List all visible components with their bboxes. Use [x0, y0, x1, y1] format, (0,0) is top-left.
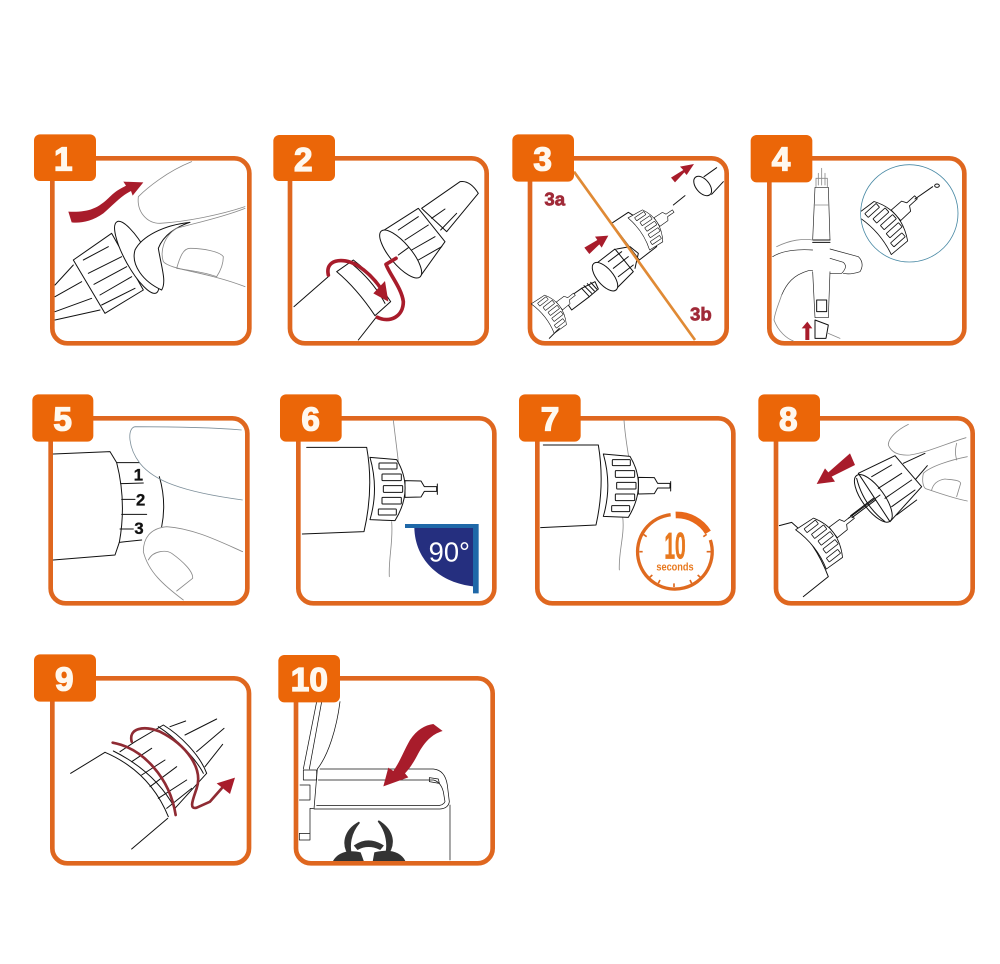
step badge 5 [32, 394, 93, 442]
icon: biohazard symbol [333, 821, 406, 862]
panel frame 1 [52, 158, 249, 343]
icon: pen head and needle [779, 493, 881, 597]
panel: step 2 screw on needle [273, 135, 487, 343]
panel frame 2 [290, 158, 487, 343]
panel: step 5 select dose [32, 394, 247, 603]
step badge 4 [751, 135, 812, 182]
step badge 8 [758, 394, 820, 442]
step badge 3: 3 [533, 141, 552, 178]
icon: skin line [619, 420, 629, 570]
panel: step 10 dispose in sharps bin [278, 655, 493, 863]
step badge 1 [34, 134, 96, 181]
icon: fingers on dial [130, 427, 243, 600]
step badge 9: 9 [55, 661, 74, 698]
step badge 2 [273, 135, 335, 181]
step badge 6 [280, 394, 342, 442]
icon: dose dial [53, 452, 164, 560]
dose number 1: 1 [134, 465, 143, 484]
icon: 90 degree angle [405, 524, 479, 593]
panel: step 8 replace outer cap [758, 394, 973, 603]
panel frame 7 [537, 418, 733, 603]
step badge 8: 8 [779, 401, 798, 438]
step badge 10: 10 [291, 662, 328, 699]
icon: hand holding pen upright [773, 168, 862, 341]
icon: fingers pulling cap [55, 162, 245, 320]
panel frame 6 [298, 418, 494, 603]
icon: sharps bin [299, 702, 450, 860]
arrow: drop into bin [383, 724, 443, 786]
timer: 10 seconds: seconds [656, 561, 694, 573]
panel: step 7 hold for 10 seconds [519, 394, 733, 603]
step badge 4: 4 [772, 141, 791, 178]
step badge 7: 7 [541, 401, 559, 438]
panel: step 1 remove outer cap [34, 134, 249, 343]
inset: needle droplet [856, 165, 958, 262]
step badge 1: 1 [54, 141, 73, 178]
panel frame 8 [776, 418, 973, 603]
step badge 5: 5 [53, 401, 72, 438]
divider: 3a and 3b [574, 172, 695, 340]
arrow: cap direction [817, 453, 855, 484]
icon: 90 degree angle: 90° [429, 537, 470, 568]
panel: step 3 attach needle and remove cap [512, 134, 727, 343]
arrow: unscrew direction [113, 728, 235, 815]
panel: step 9 unscrew needle [34, 654, 249, 863]
dose number 2: 2 [136, 491, 145, 510]
dose number 3: 3 [134, 519, 144, 538]
step badge 9 [34, 654, 96, 702]
arrow: pull direction [68, 182, 143, 223]
arrow: press up [802, 322, 812, 340]
label 3a: 3a [544, 188, 566, 209]
panel: step 4 prime pen [751, 135, 964, 343]
icon: pen heads and caps [531, 168, 723, 338]
icon: skin line [389, 420, 398, 577]
panel frame 9 [52, 678, 249, 863]
step badge 7 [519, 394, 581, 442]
step badge 10 [278, 655, 340, 702]
panel frame 10 [296, 678, 493, 863]
panel frame 3 [530, 158, 727, 343]
step badge 2: 2 [294, 142, 313, 179]
panel frame 5 [51, 418, 247, 603]
icon: pen at skin [302, 447, 437, 534]
icon: pen at skin [541, 445, 671, 528]
panel: step 6 inject at 90 degrees [280, 394, 494, 603]
timer: 10 seconds: 10 [664, 525, 686, 566]
icon: pen and needle cap [294, 181, 478, 340]
icon: capped pen head [71, 719, 224, 849]
timer: 10 seconds [638, 515, 712, 589]
arrow: 3a push on [584, 236, 608, 254]
arrow: 3b pull off [671, 164, 694, 182]
icon: outer cap and fingers [848, 424, 967, 528]
label 3b: 3b [690, 304, 712, 325]
step badge 3 [512, 134, 574, 182]
panel frame 4 [769, 158, 964, 343]
arrow: twist direction [328, 258, 403, 320]
step badge 6: 6 [301, 401, 320, 438]
